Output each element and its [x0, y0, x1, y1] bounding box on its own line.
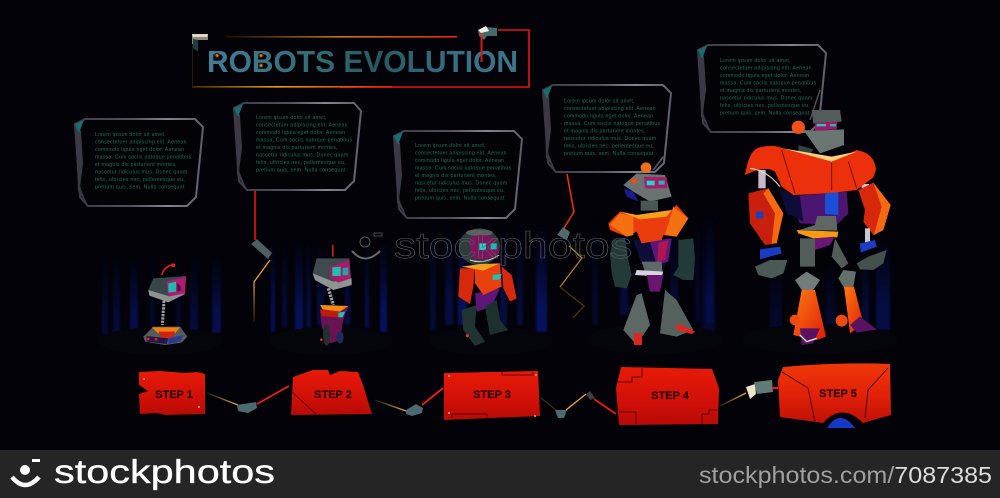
- panel 5: consectetuer adipiscing elit. Aenean: [720, 66, 812, 72]
- panel 1: felis, ultricies nec, pellentesque eu,: [95, 177, 185, 183]
- step 2: [291, 370, 372, 415]
- panel 5: et magnis dis parturient montes,: [720, 88, 802, 94]
- panel 3: et magnis dis parturient montes,: [415, 173, 497, 179]
- panel 4: consectetuer adipiscing elit. Aenean: [564, 106, 656, 112]
- robot 1: [143, 263, 187, 345]
- panel 5: commodo ligula eget dolor. Aenean: [720, 73, 809, 79]
- icon: title connector left: [192, 34, 208, 52]
- panel 1: Lorem ipsum dolor sit amet,: [95, 132, 166, 138]
- panel 4: et magnis dis parturient montes,: [564, 128, 646, 134]
- footer logo text: stockphotos: [54, 453, 275, 490]
- panel 2: nascetur ridiculus mus. Donec quam: [256, 152, 348, 158]
- panel 2: pretium quis, sem. Nulla consequat: [256, 168, 346, 174]
- panel 2: [234, 103, 361, 190]
- robot 2: [313, 245, 352, 346]
- panel 2: felis, ultricies nec, pellentesque eu,: [256, 160, 346, 166]
- step 1: STEP 1: [155, 389, 193, 401]
- panel 3: massa. Cum sociis natoque penatibus: [415, 166, 512, 172]
- panel 5: felis, ultricies nec, pellentesque eu,: [720, 103, 810, 109]
- robot platforms: [98, 324, 898, 355]
- icon: title connector right: [478, 26, 497, 40]
- arrow: panel 2 wire: [251, 191, 272, 322]
- panel 4: nascetur ridiculus mus. Donec quam: [564, 136, 656, 142]
- panel 3: consectetuer adipiscing elit. Aenean: [415, 150, 507, 156]
- panel 4: felis, ultricies nec, pellentesque eu,: [564, 144, 654, 150]
- connector: step 4 to step 5: [720, 380, 778, 406]
- panel 3: felis, ultricies nec, pellentesque eu,: [415, 188, 505, 194]
- panel 2: et magnis dis parturient montes,: [256, 145, 338, 151]
- panel 2: Lorem ipsum dolor sit amet,: [256, 115, 327, 121]
- panel 5: massa. Cum sociis natoque penatibus: [720, 80, 817, 86]
- step 1: [139, 371, 205, 415]
- title frame: [192, 30, 529, 88]
- panel 5: pretium quis, sem. Nulla consequat: [720, 110, 810, 116]
- curtain: robot 1: [102, 255, 221, 335]
- connector: step 2 to step 3: [375, 388, 443, 416]
- curtain: robot 4: [592, 215, 714, 325]
- panel 4: massa. Cum sociis natoque penatibus: [564, 121, 661, 127]
- panel 3: pretium quis, sem. Nulla consequat: [415, 196, 505, 202]
- panel 4: commodo ligula eget dolor. Aenean: [564, 114, 653, 120]
- step 4: STEP 4: [651, 390, 690, 402]
- panel 1: massa. Cum sociis natoque penatibus: [95, 154, 192, 160]
- curtain: robot 2: [271, 240, 387, 333]
- step 3: STEP 3: [473, 389, 511, 401]
- title: ROBOTS EVOLUTION: [207, 44, 518, 79]
- footer bar: [0, 450, 1000, 498]
- panel 2: consectetuer adipiscing elit. Aenean: [256, 122, 348, 128]
- footer logo icon: [12, 459, 40, 485]
- step 2: STEP 2: [314, 389, 352, 401]
- panel 3: commodo ligula eget dolor. Aenean: [415, 158, 504, 164]
- panel 2: commodo ligula eget dolor. Aenean: [256, 130, 345, 136]
- connector: step 3 to step 4: [541, 391, 616, 418]
- step 3: [444, 371, 540, 420]
- arrow: panel 4 wire: [557, 174, 584, 318]
- panel 2: massa. Cum sociis natoque penatibus: [256, 138, 353, 144]
- panel 5: Lorem ipsum dolor sit amet,: [720, 58, 791, 64]
- panel 1: commodo ligula eget dolor. Aenean: [95, 147, 184, 153]
- panel 4: Lorem ipsum dolor sit amet,: [564, 98, 635, 104]
- panel 1: et magnis dis parturient montes,: [95, 162, 177, 168]
- step 5: [778, 363, 891, 428]
- connector: step 1 to step 2: [207, 386, 289, 413]
- panel 4: [543, 85, 671, 172]
- robot 3: [458, 228, 517, 346]
- curtain: robot 5: [702, 215, 890, 335]
- panel 3: nascetur ridiculus mus. Donec quam: [415, 180, 507, 186]
- footer url: stockphotos.com/ 7087385: [699, 462, 992, 488]
- panel 5: nascetur ridiculus mus. Donec quam: [720, 96, 812, 102]
- panel 1: [75, 119, 203, 206]
- panel 4: pretium quis, sem. Nulla consequat: [564, 151, 654, 157]
- watermark: stockphotos: [394, 225, 632, 266]
- panel 3: [394, 131, 522, 218]
- step 4: [616, 367, 719, 425]
- panel 1: nascetur ridiculus mus. Donec quam: [95, 170, 187, 176]
- panel 3: Lorem ipsum dolor sit amet,: [415, 143, 486, 149]
- robot 4: [608, 157, 695, 345]
- panel 1: pretium quis, sem. Nulla consequat: [95, 184, 185, 190]
- panel 5: [698, 45, 826, 132]
- robot 5: [745, 90, 891, 345]
- step 5: STEP 5: [819, 388, 857, 400]
- panel 1: consectetuer adipiscing elit. Aenean: [95, 140, 187, 146]
- curtain: robot 3: [430, 225, 547, 332]
